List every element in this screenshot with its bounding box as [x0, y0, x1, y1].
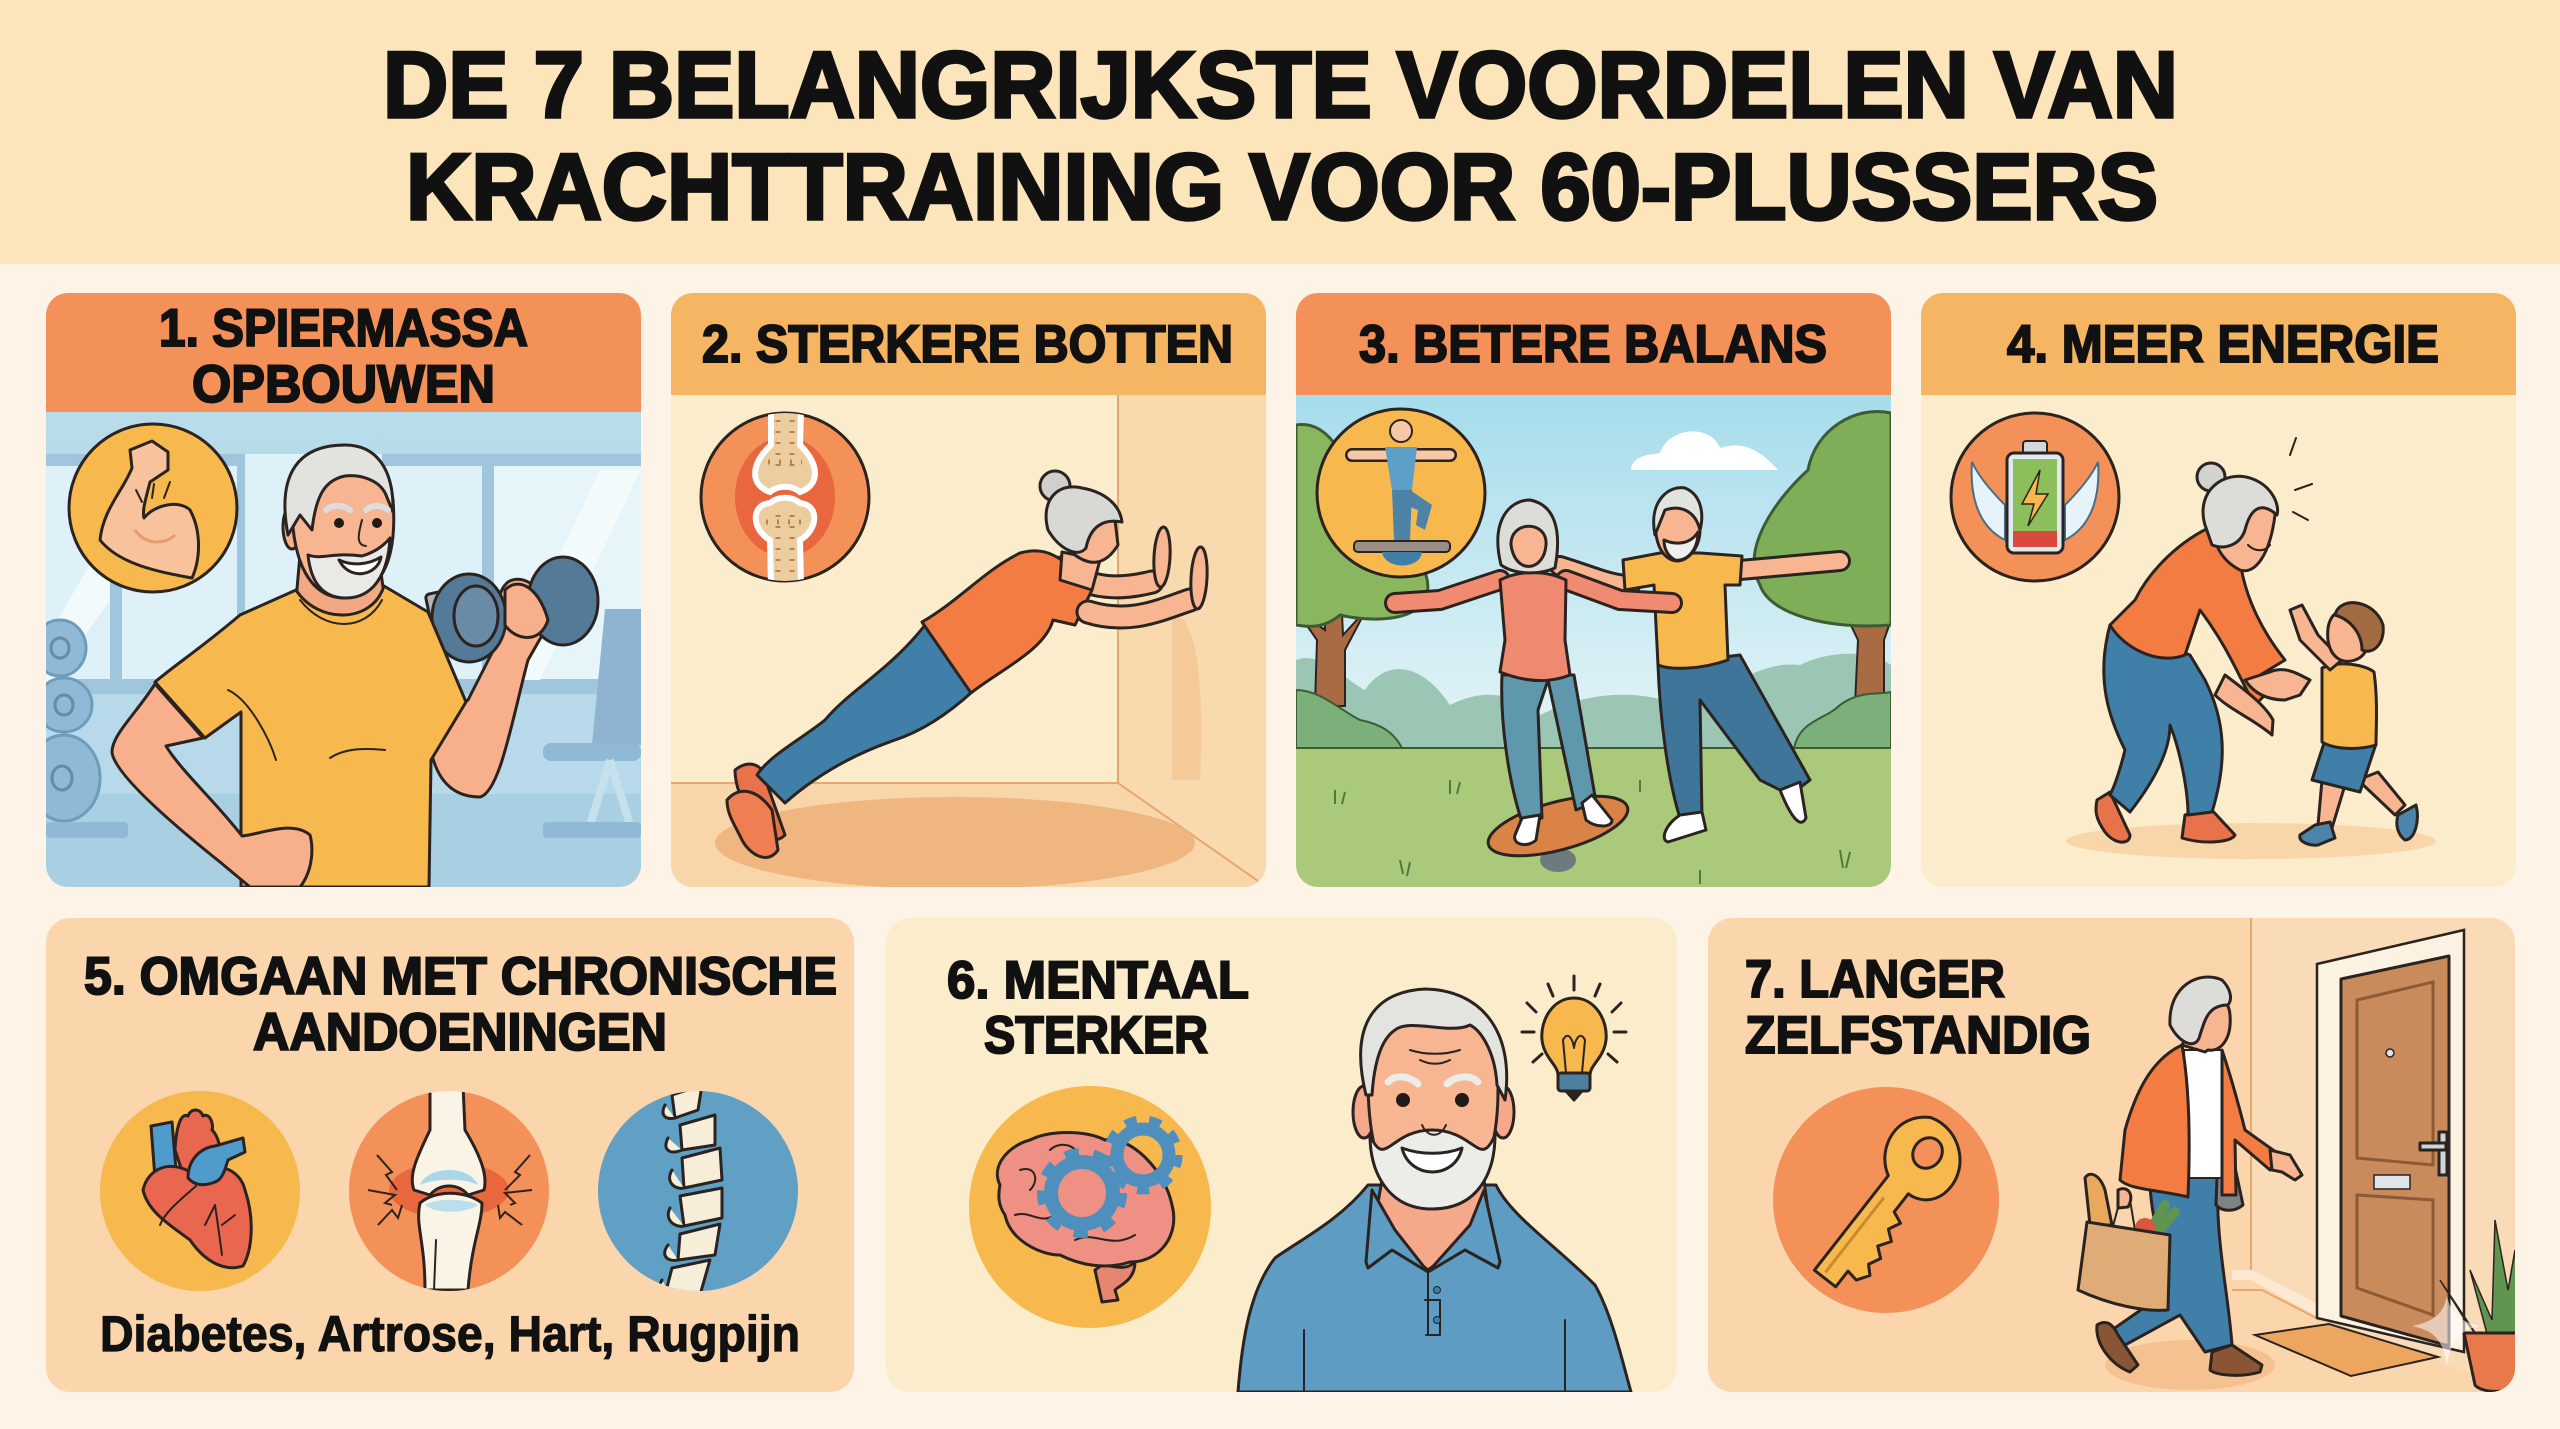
grandmother	[2096, 438, 2312, 842]
title band	[0, 0, 2560, 264]
orange sweater	[2110, 525, 2285, 705]
header: 2. sterkere botten	[671, 293, 1266, 395]
icon: bone joint	[701, 410, 869, 585]
icon: spine	[598, 1085, 798, 1295]
woman's pink top	[1500, 572, 1570, 681]
door	[2317, 930, 2464, 1352]
panel background and room	[1708, 918, 2515, 1392]
wall and floor scene	[671, 395, 1266, 889]
title	[383, 32, 2178, 239]
header: 1. spiermassa opbouwen	[46, 293, 641, 414]
park scene	[1296, 395, 1891, 887]
title: DE 7 BELANGRIJKSTE VOORDELEN VAN	[383, 32, 2178, 137]
shoulder bag	[2216, 1120, 2243, 1210]
head	[2197, 463, 2225, 491]
heading: AANDOENINGEN	[253, 1003, 667, 1062]
blue trousers	[2104, 625, 2222, 815]
header: 1. spiermassa opbouwen: 1. SPIERMASSA	[159, 299, 528, 358]
white shirt	[2184, 1050, 2222, 1178]
arm holding dumbbell	[428, 579, 548, 797]
heading	[947, 951, 1249, 1065]
head	[282, 512, 296, 550]
hand	[2270, 1150, 2302, 1180]
smile	[1402, 1148, 1462, 1172]
header: 2. sterkere botten: 2. STERKERE BOTTEN	[702, 315, 1233, 374]
panel background	[1921, 395, 2516, 887]
woman's arms	[1395, 580, 1672, 603]
panel 3: betere balans	[1296, 293, 1891, 887]
shoes	[2096, 792, 2130, 842]
man's yellow shirt	[1623, 553, 1742, 668]
woman with groceries	[2078, 977, 2302, 1390]
orange cardigan	[2120, 1045, 2189, 1197]
panel 5: omgaan met chronische aandoeningen	[46, 918, 854, 1392]
header: 3. betere balans	[1296, 293, 1891, 395]
man's head	[1655, 502, 1700, 561]
gear small	[1108, 1120, 1178, 1190]
header: 3. betere balans: 3. BETERE BALANS	[1359, 315, 1827, 374]
icon: brain with gears	[969, 1086, 1211, 1328]
woman's legs	[1502, 675, 1596, 822]
yellow shirt	[155, 586, 466, 887]
panel 2: sterkere botten	[671, 293, 1266, 889]
face	[1368, 1015, 1498, 1209]
trousers	[2112, 1175, 2232, 1352]
dumbbell	[425, 557, 598, 662]
ears	[1353, 1086, 1375, 1138]
watermark sparkle	[2412, 1295, 2480, 1368]
far arm	[1061, 568, 1152, 587]
panel 1: spiermassa opbouwen	[28, 293, 641, 887]
icon: balance figure	[1317, 409, 1485, 577]
woman doing wall push-up	[727, 471, 1209, 857]
panel background	[46, 918, 854, 1392]
door mat	[2255, 1324, 2438, 1376]
blue leggings	[757, 625, 972, 803]
couple balancing	[1395, 488, 1840, 872]
icon: key	[1773, 1087, 1999, 1313]
man portrait	[1238, 989, 1631, 1392]
header: 4. meer energie	[1921, 293, 2516, 395]
heading	[1745, 950, 2091, 1065]
head and hair	[1040, 471, 1070, 501]
icon: flexed bicep	[69, 424, 237, 592]
gear large	[1042, 1153, 1122, 1233]
man's legs	[1658, 655, 1810, 818]
gym scene background	[28, 412, 641, 887]
man with dumbbell	[112, 445, 598, 887]
groceries and bag	[2085, 1174, 2112, 1225]
icon: battery with wings	[1951, 413, 2119, 581]
shadow	[2066, 823, 2436, 859]
plant	[2440, 1220, 2520, 1391]
shoes	[2097, 1322, 2138, 1372]
orange top	[922, 551, 1092, 693]
woman's head	[1498, 500, 1558, 573]
near arm	[1088, 600, 1190, 617]
balance board	[1540, 848, 1576, 872]
neck	[296, 560, 384, 614]
heading: 7. LANGER	[1745, 950, 2005, 1009]
title: KRACHTTRAINING VOOR 60-PLUSSERS	[406, 134, 2158, 239]
icon: light bulb	[1522, 976, 1626, 1100]
panel 7: langer zelfstandig	[1708, 918, 2520, 1392]
heading: 5. OMGAAN MET CHRONISCHE	[84, 947, 837, 1006]
man far arm	[1560, 566, 1630, 585]
heading: 6. MENTAAL	[947, 951, 1249, 1010]
caption: conditions: Diabetes, Artrose, Hart, Rugpijn	[100, 1306, 800, 1362]
panel 6: mentaal sterker	[886, 918, 1677, 1392]
child	[2290, 603, 2417, 845]
icon: heart	[100, 1091, 300, 1291]
neck	[1374, 1180, 1490, 1270]
heading: ZELFSTANDIG	[1745, 1006, 2091, 1065]
shirt	[1238, 1185, 1631, 1392]
icon: knee joint	[349, 1085, 549, 1291]
heading	[84, 947, 837, 1062]
left arm on hip	[112, 684, 312, 887]
heading: STERKER	[984, 1006, 1208, 1065]
panel background	[886, 918, 1677, 1392]
shoes	[735, 764, 785, 840]
header: 1. spiermassa opbouwen: OPBOUWEN	[192, 355, 495, 414]
placket	[1425, 1272, 1440, 1335]
head	[2182, 996, 2230, 1052]
beard	[1370, 1130, 1495, 1209]
eyes	[1396, 1093, 1410, 1107]
header: 4. meer energie: 4. MEER ENERGIE	[2007, 315, 2439, 374]
collar	[1366, 1190, 1500, 1272]
panel 4: meer energie	[1921, 293, 2516, 887]
arms and hands	[2245, 670, 2310, 700]
hair	[1361, 989, 1507, 1100]
